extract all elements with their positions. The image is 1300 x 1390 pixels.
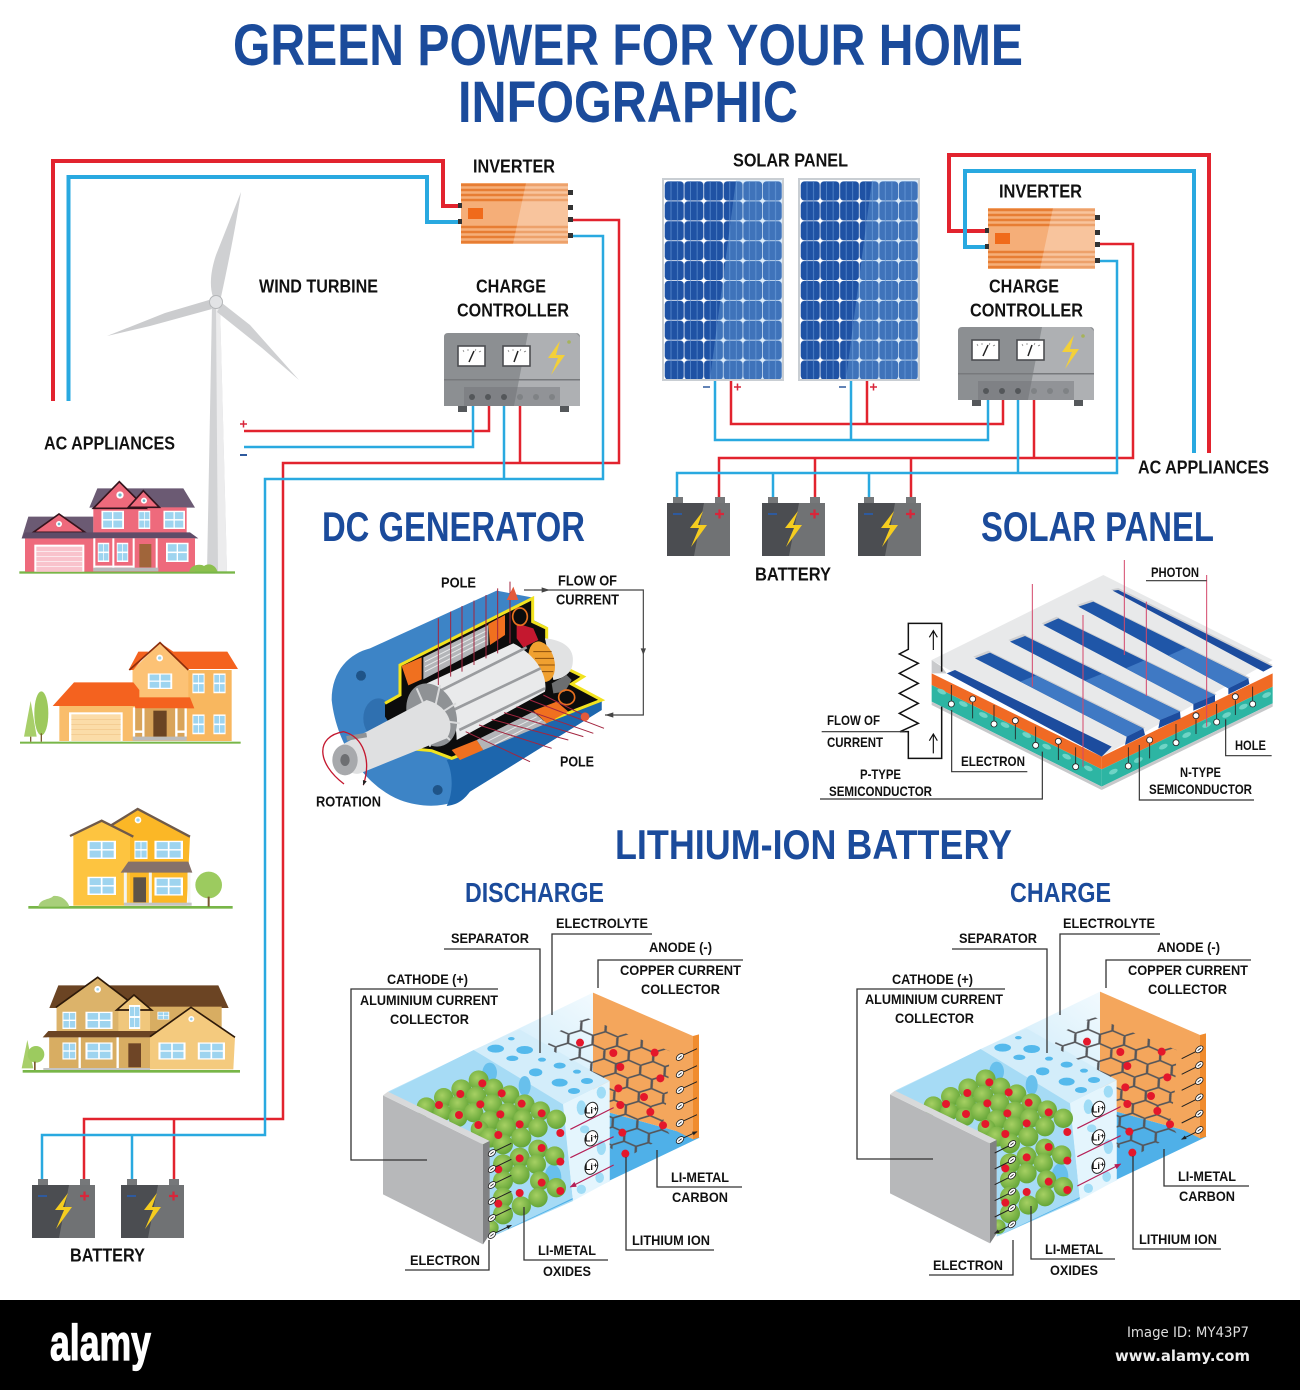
title: INFOGRAPHIC xyxy=(458,70,798,135)
charge cell illustration: Li⁺ xyxy=(1092,1104,1105,1114)
label: li-metal carbon xyxy=(1178,1168,1236,1204)
wires: solar system xyxy=(677,155,1209,498)
house: yellow xyxy=(28,809,233,909)
generator cutaway illustration xyxy=(323,582,646,806)
label: flow of current: CURRENT xyxy=(827,734,883,750)
house: tan xyxy=(22,977,240,1073)
icon: polarity marks xyxy=(240,420,247,456)
label: charge controller: CONTROLLER xyxy=(970,300,1083,320)
label: photon: PHOTON xyxy=(1151,564,1199,580)
discharge cell illustration: Li⁺ xyxy=(585,1105,598,1115)
website: www.alamy.com xyxy=(1115,1347,1250,1365)
label: anode and copper current collector: ANODE (-) xyxy=(649,939,712,955)
label: solar panel: SOLAR PANEL xyxy=(733,150,848,170)
label: pole: POLE xyxy=(560,754,594,770)
label: p-type semiconductor: SEMICONDUCTOR xyxy=(829,783,932,799)
title: GREEN POWER FOR YOUR HOME xyxy=(233,13,1023,78)
label: li-metal oxides xyxy=(538,1242,596,1279)
label: rotation: ROTATION xyxy=(316,794,381,810)
label: li-metal oxides: OXIDES xyxy=(543,1263,591,1279)
label: inverter: INVERTER xyxy=(473,156,555,176)
heading: DC generator: DC GENERATOR xyxy=(322,503,585,550)
label: li-metal carbon xyxy=(671,1169,729,1205)
label: cathode and aluminium current collector: ALUMINIUM CURRENT xyxy=(360,992,498,1008)
label: anode and copper current collector: COLLECTOR xyxy=(641,981,720,997)
image id: Image ID: MY43P7 xyxy=(1127,1325,1249,1341)
label: AC appliances: AC APPLIANCES xyxy=(1138,458,1269,478)
label: li-metal oxides: LI-METAL xyxy=(1045,1241,1103,1257)
label: li-metal carbon: CARBON xyxy=(672,1189,728,1205)
solar cell illustration xyxy=(820,560,1273,800)
wires: wind system xyxy=(42,161,619,1180)
watermark logo: alamy xyxy=(50,1315,151,1371)
label: pole: POLE xyxy=(441,574,476,592)
discharge cell illustration: Li⁺ xyxy=(585,1134,598,1144)
label: cathode and aluminium current collector xyxy=(865,971,1003,1026)
panel: wind power system xyxy=(32,156,619,1266)
label: flow of current: FLOW OF xyxy=(827,712,880,728)
heading: solar panel: SOLAR PANEL xyxy=(981,503,1214,550)
heading: discharge: DISCHARGE xyxy=(465,877,604,908)
panel: discharge xyxy=(351,877,743,1279)
panel: DC generator diagram xyxy=(316,572,646,810)
label: battery: BATTERY xyxy=(70,1246,145,1266)
label: charge controller: CHARGE xyxy=(476,276,546,296)
label: electrolyte: ELECTROLYTE xyxy=(556,915,648,931)
icon: batteries xyxy=(667,497,921,556)
label: li-metal carbon: LI-METAL xyxy=(671,1169,729,1185)
panel: charge xyxy=(857,877,1251,1278)
charge cell illustration: Li⁺ xyxy=(1092,1133,1105,1143)
icon: charge controller xyxy=(444,333,580,412)
label: electron: ELECTRON xyxy=(933,1257,1003,1273)
label: cathode and aluminium current collector: CATHODE (+) xyxy=(387,971,468,987)
label: n-type semiconductor: N-TYPE xyxy=(1180,764,1221,780)
label: anode and copper current collector: COPPER CURRENT xyxy=(620,962,741,978)
leader lines: charge xyxy=(857,934,1251,1275)
label: separator: SEPARATOR xyxy=(451,930,529,946)
label: anode and copper current collector xyxy=(1128,939,1248,997)
wind turbine xyxy=(107,192,299,572)
icon: batteries xyxy=(32,1179,184,1238)
label: anode and copper current collector: ANODE (-) xyxy=(1157,939,1220,955)
label: inverter: INVERTER xyxy=(999,182,1082,202)
label: cathode and aluminium current collector: COLLECTOR xyxy=(895,1010,974,1026)
label: li-metal oxides: OXIDES xyxy=(1050,1262,1098,1278)
label: cathode and aluminium current collector xyxy=(360,971,498,1027)
label: n-type semiconductor xyxy=(1149,764,1252,797)
panel: solar power system xyxy=(662,150,1269,584)
label: anode and copper current collector: COLLECTOR xyxy=(1148,981,1227,997)
label: flow of current xyxy=(827,712,883,750)
label: li-metal carbon: LI-METAL xyxy=(1178,1168,1236,1184)
label: cathode and aluminium current collector: ALUMINIUM CURRENT xyxy=(865,991,1003,1007)
discharge cell illustration xyxy=(383,993,700,1244)
icon: polarity marks xyxy=(703,384,877,390)
label: flow of current: CURRENT xyxy=(556,592,619,608)
label: charge controller: CHARGE xyxy=(989,276,1059,296)
charge cell illustration: Li⁺ xyxy=(1092,1161,1105,1171)
label: charge controller: CONTROLLER xyxy=(457,300,569,320)
label: separator: SEPARATOR xyxy=(959,930,1037,946)
label: cathode and aluminium current collector: CATHODE (+) xyxy=(892,971,973,987)
label: p-type semiconductor xyxy=(829,766,932,799)
icon: charge controller xyxy=(958,327,1094,406)
icon: inverter xyxy=(458,183,573,244)
panel: solar cell diagram xyxy=(820,560,1273,800)
label: n-type semiconductor: SEMICONDUCTOR xyxy=(1149,781,1252,797)
footer bar xyxy=(0,1300,1300,1390)
label: li-metal oxides xyxy=(1045,1241,1103,1278)
house: orange xyxy=(20,643,241,744)
label: battery: BATTERY xyxy=(755,564,831,584)
label: lithium ion: LITHIUM ION xyxy=(632,1232,710,1248)
house: pink xyxy=(19,482,235,574)
label: charge controller xyxy=(457,276,569,320)
label: electron: ELECTRON xyxy=(410,1252,480,1268)
label: wind turbine: WIND TURBINE xyxy=(259,276,378,296)
discharge cell illustration: Li⁺ xyxy=(585,1162,598,1172)
label: p-type semiconductor: P-TYPE xyxy=(860,766,901,782)
label: lithium ion: LITHIUM ION xyxy=(1139,1231,1217,1247)
label: flow of current: FLOW OF xyxy=(558,572,617,590)
title xyxy=(233,13,1023,135)
label: electrolyte: ELECTROLYTE xyxy=(1063,915,1155,931)
label: anode and copper current collector: COPPER CURRENT xyxy=(1128,962,1248,978)
heading: lithium-ion battery: LITHIUM-ION BATTERY xyxy=(615,821,1012,868)
charge cell illustration xyxy=(890,992,1207,1243)
label: cathode and aluminium current collector: COLLECTOR xyxy=(390,1011,469,1027)
icon: inverter xyxy=(985,208,1100,269)
icon: solar panels xyxy=(662,178,920,381)
leader lines: discharge xyxy=(351,934,743,1270)
label: flow of current xyxy=(556,572,619,608)
label: charge controller xyxy=(970,276,1083,320)
label: li-metal carbon: CARBON xyxy=(1179,1188,1235,1204)
label: hole: HOLE xyxy=(1235,737,1266,753)
label: AC appliances: AC APPLIANCES xyxy=(44,434,175,454)
label: electron: ELECTRON xyxy=(961,753,1025,769)
label: li-metal oxides: LI-METAL xyxy=(538,1242,596,1258)
heading: charge: CHARGE xyxy=(1010,877,1111,908)
label: anode and copper current collector xyxy=(620,939,741,997)
